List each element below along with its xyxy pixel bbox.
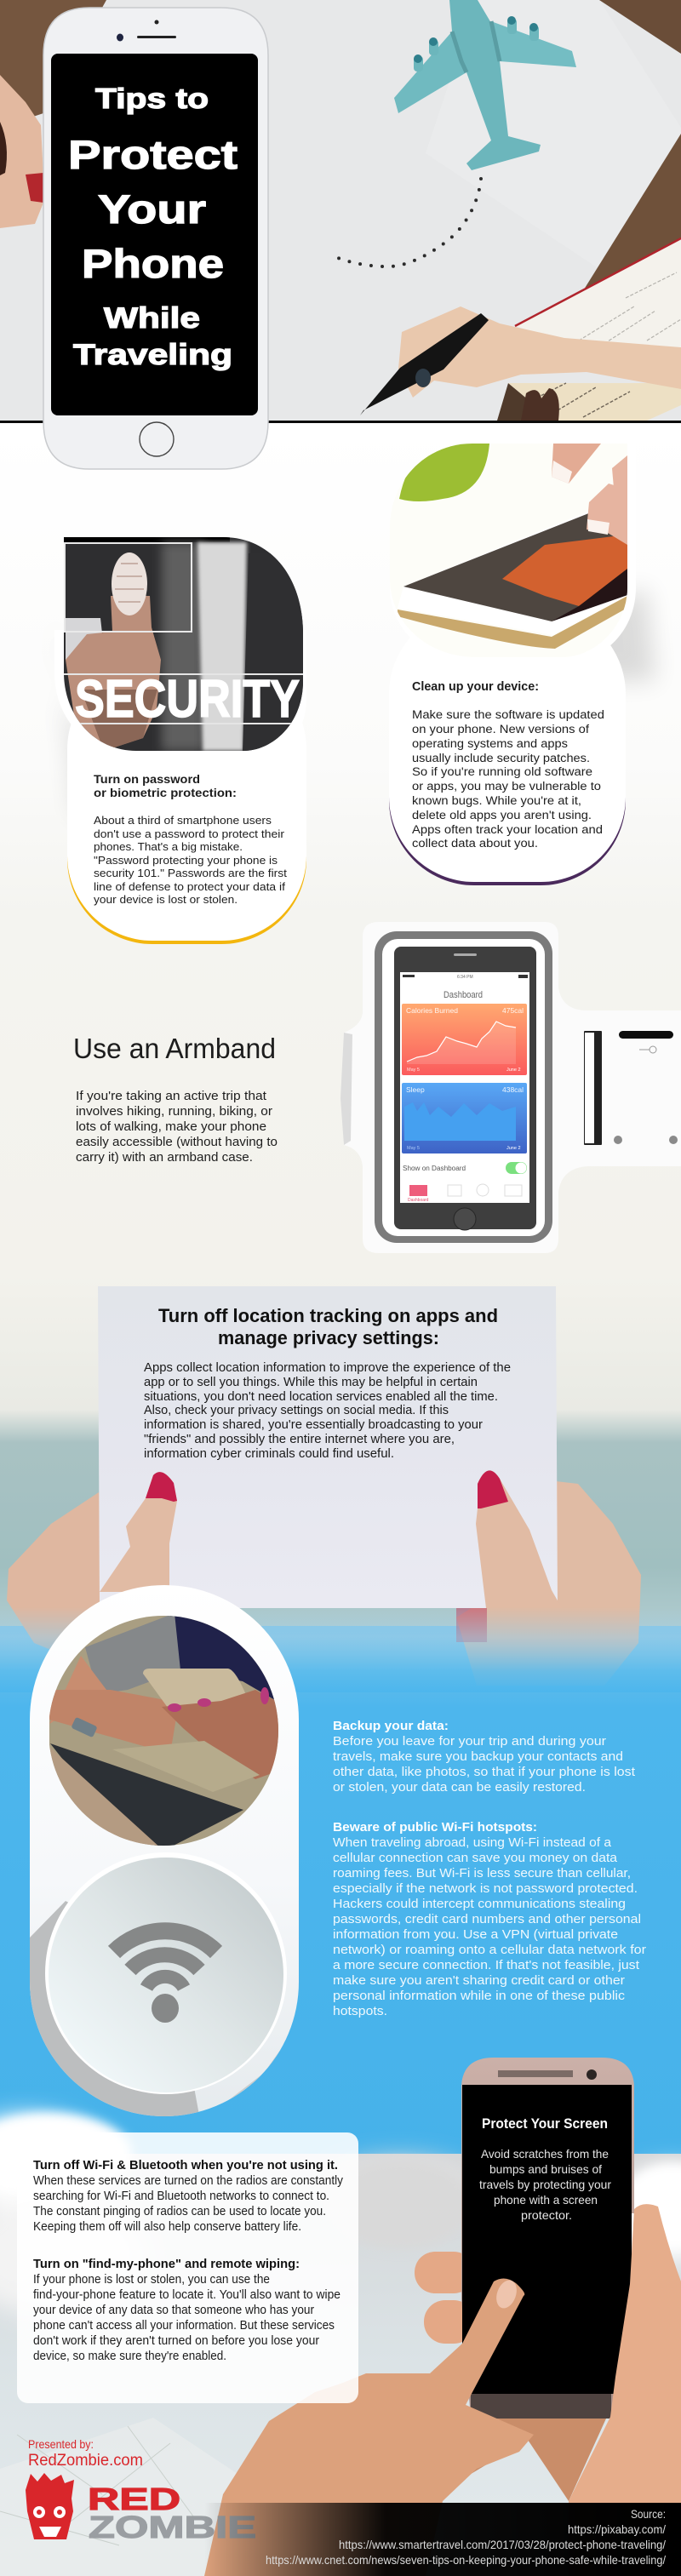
- body text: or apps, you may be vulnerable to: [412, 780, 601, 793]
- body text: Make sure the software is updated: [412, 708, 604, 721]
- calories card: May 5: [407, 1068, 420, 1073]
- text: beware of public wifi hotspots: a more secure connection. If that's not feasible, just: [333, 1958, 640, 1972]
- background: page: [0, 423, 681, 1274]
- body text: on your phone. New versions of: [412, 723, 589, 736]
- phone white front: [398, 495, 627, 635]
- title: Tips to: [95, 83, 209, 114]
- text: backup your data: [333, 1719, 636, 1795]
- background: sea: [0, 1274, 681, 1640]
- card white body: [389, 609, 626, 882]
- panel: white pill with images: [30, 1585, 299, 2120]
- body text: [412, 708, 604, 850]
- text: beware of public wifi hotspots: Beware of public Wi-Fi hotspots:: [333, 1820, 537, 1835]
- notebook handwriting: [579, 272, 681, 349]
- label B: [669, 1136, 678, 1144]
- body: wifi and bluetooth: searching for Wi-Fi and Bluetooth networks to connect to.: [33, 2190, 329, 2203]
- text: backup your data: travels, make sure you backup your contacts and: [333, 1749, 623, 1764]
- dotted flight path: [329, 179, 481, 266]
- title: Your: [98, 186, 206, 232]
- text: beware of public wifi hotspots: When traveling abroad, using Wi-Fi instead of a: [333, 1835, 612, 1850]
- white inner frame: [382, 939, 545, 1236]
- wifi disc rim: [45, 1852, 287, 2094]
- pen: [360, 313, 489, 415]
- back fingers: [415, 2252, 474, 2293]
- text: armband body: involves hiking, running, biking, or: [76, 1105, 272, 1119]
- heading: [94, 772, 237, 799]
- source text: [266, 2507, 666, 2567]
- notebook red edge: [515, 238, 681, 326]
- heading: wifi and bluetooth: Turn off Wi-Fi & Bluetooth when you're not using it.: [33, 2158, 338, 2172]
- back finger two: [424, 2300, 475, 2344]
- text: beware of public wifi hotspots: passwords, credit card numbers and other personal: [333, 1912, 641, 1926]
- card purple base: [389, 621, 626, 885]
- front camera: [117, 34, 123, 41]
- home button: [454, 1208, 476, 1230]
- body: wifi and bluetooth: The constant pinging of radios can be used to locate you.: [33, 2205, 326, 2218]
- heading: or biometric protection:: [94, 786, 237, 799]
- panel: wifi and find-my-phone tips: [17, 2132, 358, 2403]
- panel: clean up your device: [389, 444, 655, 885]
- security word: SECURITY: [75, 670, 300, 729]
- wordmark red: RED: [88, 2482, 180, 2516]
- paper body: app or to sell you things. While this may be helpful in certain: [144, 1376, 478, 1389]
- green apple: [399, 444, 489, 501]
- wifi disc light wedge: [228, 2050, 281, 2100]
- text: beware of public wifi hotspots: information from you. Use a VPN (virtual private: [333, 1927, 618, 1942]
- calories card: 475cal: [502, 1006, 524, 1015]
- text: backup your data: other data, like photos, so that if your phone is lost: [333, 1765, 636, 1779]
- text: backup your data: Backup your data:: [333, 1719, 449, 1733]
- coffee cup: [0, 122, 7, 175]
- right hand: [569, 2204, 681, 2576]
- screen body: travels by protecting your: [479, 2178, 611, 2191]
- earpiece dot: [155, 20, 158, 24]
- heading: use an armband: Use an Armband: [73, 1033, 276, 1064]
- body text: [94, 814, 287, 906]
- sleep card: [402, 1083, 527, 1153]
- text: armband body: easily accessible (without having to: [76, 1136, 278, 1149]
- phone screen: [403, 513, 627, 621]
- left nail: [146, 1472, 177, 1502]
- body: wifi and bluetooth: When these services are turned on the radios are constantly: [33, 2174, 344, 2188]
- earpiece: [137, 36, 176, 38]
- body text: About a third of smartphone users: [94, 814, 272, 827]
- text: armband body: carry it) with an armband case.: [76, 1151, 253, 1165]
- body: find my phone: don't work if they aren't turned on before you lose your: [33, 2334, 319, 2348]
- body: find my phone: find-your-phone feature to locate it. You'll also want to wipe: [33, 2288, 340, 2302]
- card shadow: [54, 613, 255, 817]
- body text: "Password protecting your phone is: [94, 854, 278, 867]
- phone photo: [390, 444, 627, 657]
- image backing: [390, 444, 636, 663]
- phone camera: [587, 2069, 597, 2080]
- presented by credit: Presented by:: [28, 2437, 94, 2451]
- title: Traveling: [73, 339, 232, 371]
- show on dashboard: Show on Dashboard: [403, 1165, 466, 1172]
- main hand and index finger: [204, 2278, 534, 2576]
- body text: phones. That's a big mistake.: [94, 840, 243, 853]
- calories card: June 2: [506, 1068, 521, 1073]
- paper heading: manage privacy settings:: [218, 1327, 439, 1348]
- title: Protect: [68, 132, 237, 177]
- hero photo: [0, 0, 681, 421]
- armband illustration: [340, 922, 681, 1253]
- screen heading: Protect Your Screen: [482, 2115, 608, 2132]
- title: [68, 83, 237, 371]
- status bar: 6:34 PM: [457, 975, 473, 980]
- card shadow: [426, 587, 655, 681]
- wifi disc: [49, 1858, 283, 2092]
- thumbnail: [493, 2277, 520, 2311]
- fade into clouds: [0, 1607, 681, 1692]
- photo: hands holding paper: [0, 1286, 681, 1692]
- dark fingers under notebook: [521, 388, 559, 421]
- screen body: [479, 2147, 611, 2222]
- screen body: phone with a screen: [494, 2193, 598, 2207]
- orange flower: [502, 535, 627, 606]
- presented by credit: RedZombie.com: [28, 2452, 143, 2470]
- palm under phone: [426, 2409, 610, 2501]
- body text: So if you're running old software: [412, 765, 592, 778]
- body text: delete old apps you aren't using.: [412, 809, 592, 821]
- paper body: Also, check your privacy settings on social media. If this: [144, 1404, 449, 1417]
- notebook page: [515, 238, 681, 358]
- calories card: [402, 1004, 527, 1075]
- paper: [98, 1286, 558, 1608]
- background: sky: [0, 1626, 681, 2171]
- text: beware of public wifi hotspots: personal information while in one of these public: [333, 1989, 626, 2003]
- grey frame: [375, 931, 552, 1243]
- logo: red zombie: [26, 2473, 256, 2545]
- paper body: Apps collect location information to improve the experience of the: [144, 1361, 511, 1375]
- nail: [415, 369, 431, 387]
- body text: your device is lost or stolen.: [94, 893, 237, 906]
- home button: [140, 422, 174, 456]
- heading: Clean up your device:: [412, 680, 539, 694]
- black band: [204, 2503, 681, 2576]
- text: beware of public wifi hotspots: make sure you aren't sharing credit card or other: [333, 1973, 625, 1988]
- source bar: [204, 2503, 681, 2576]
- black divider bar: [0, 421, 681, 423]
- screen body: Avoid scratches from the: [481, 2147, 609, 2161]
- image backing: [54, 630, 306, 758]
- fingers: [552, 444, 601, 484]
- tab bar: Dashboard: [408, 1198, 429, 1203]
- screen body: bumps and bruises of: [489, 2162, 602, 2176]
- pill: [30, 1585, 299, 2116]
- zombie head icon: [26, 2473, 74, 2539]
- label A: [614, 1136, 622, 1144]
- phone screen: [400, 972, 529, 1203]
- top speaker: [498, 2070, 573, 2077]
- left thumb: [100, 1472, 177, 1592]
- wifi disc drop shadow: [30, 1901, 200, 2120]
- battery: [518, 975, 528, 978]
- title: While: [104, 302, 200, 335]
- screen: [51, 54, 258, 415]
- phone screen: [462, 2085, 632, 2394]
- icon: wifi: [114, 1931, 216, 2023]
- key slot: [619, 1031, 673, 1039]
- card yellow base: [67, 681, 306, 944]
- icon: key: [639, 1046, 656, 1053]
- text: beware of public wifi hotspots: network) or roaming onto a cellular data network for: [333, 1943, 646, 1957]
- phone body: [43, 8, 268, 469]
- lower notebook: [508, 383, 681, 421]
- heading: Turn on password: [94, 772, 200, 786]
- paper heading: Turn off location tracking on apps and: [158, 1305, 498, 1326]
- body: find my phone: [33, 2273, 340, 2363]
- text: armband body: [76, 1090, 278, 1165]
- text: beware of public wifi hotspots: roaming fees. But Wi-Fi is less secure than cellular,: [333, 1866, 631, 1880]
- text: beware of public wifi hotspots: Hackers could intercept communications stealing: [333, 1897, 626, 1911]
- tab bar: [408, 1184, 522, 1203]
- sleep card: Sleep: [406, 1085, 425, 1094]
- earpiece: [454, 953, 477, 956]
- body text: usually include security patches.: [412, 752, 590, 764]
- phone body: [461, 2058, 634, 2419]
- left hand: [0, 75, 43, 228]
- paper body: situations, you don't need location services enabled all the time.: [144, 1390, 498, 1404]
- text: armband body: If you're taking an active trip that: [76, 1090, 266, 1103]
- calories card: Calories Burned: [406, 1006, 458, 1015]
- presented by credit: [28, 2437, 143, 2470]
- right nail: [478, 1470, 508, 1508]
- dashboard label: Dashboard: [444, 990, 483, 1000]
- lower wood: [497, 383, 553, 421]
- body text: collect data about you.: [412, 837, 538, 850]
- finger shadow: [456, 1608, 487, 1642]
- source text: Source:: [631, 2507, 666, 2521]
- body text: Apps often track your location and: [412, 823, 603, 836]
- text: backup your data: or stolen, your data can be easily restored.: [333, 1780, 586, 1795]
- body: wifi and bluetooth: [33, 2174, 344, 2234]
- paper heading: [158, 1305, 498, 1348]
- paper folds: [426, 0, 681, 323]
- phone mockup with title: [43, 8, 268, 469]
- translucent box: [17, 2132, 358, 2403]
- red cup: [26, 173, 43, 203]
- security photo: [64, 537, 303, 751]
- photo: hands holding phone: [204, 2058, 681, 2576]
- paper body: "friends" and possibly the entire internet where you are,: [144, 1433, 455, 1446]
- panel: password and biometric protection: [54, 537, 306, 944]
- heading: find my phone: Turn on "find-my-phone" and remote wiping:: [33, 2257, 300, 2271]
- text: beware of public wifi hotspots: hotspots.: [333, 2004, 387, 2018]
- sleep card: June 2: [506, 1146, 521, 1151]
- left flap edge: [340, 1033, 352, 1145]
- text: armband body: lots of walking, make your phone: [76, 1120, 266, 1134]
- lower notebook handwriting: [532, 383, 630, 417]
- hand with pen: [398, 306, 681, 398]
- wood top left: [0, 0, 106, 119]
- icon: airplane: [394, 0, 576, 170]
- source text: https://pixabay.com/: [568, 2522, 666, 2536]
- text: beware of public wifi hotspots: cellular connection can save you money on data: [333, 1851, 618, 1865]
- strap slot: [584, 1031, 602, 1145]
- bottom speaker: [471, 2394, 611, 2419]
- toggle: [506, 1162, 527, 1174]
- body: wifi and bluetooth: Keeping them off will also help conserve battery life.: [33, 2220, 301, 2234]
- body: find my phone: device, so make sure they're enabled.: [33, 2350, 226, 2363]
- sleep card: May 5: [407, 1146, 420, 1151]
- gold edge: [398, 596, 627, 649]
- paper body: [144, 1361, 511, 1461]
- body: find my phone: phone can't access all your information. But these services: [33, 2319, 335, 2333]
- left hand behind: [7, 1492, 136, 1656]
- body: find my phone: If your phone is lost or stolen, you can use the: [33, 2273, 270, 2287]
- wood top right: [599, 0, 681, 54]
- signal dots: [403, 975, 415, 977]
- body text: operating systems and apps: [412, 737, 568, 750]
- photo: backup phone and laptop: [49, 1613, 279, 1852]
- screen body: protector.: [521, 2208, 572, 2222]
- right thumb: [476, 1470, 562, 1608]
- body: find my phone: your device of any data so that someone who has your: [33, 2304, 314, 2317]
- body text: security 101." Passwords are the first: [94, 867, 287, 879]
- body text: line of defense to protect your data if: [94, 880, 285, 893]
- body text: known bugs. While you're at it,: [412, 794, 581, 807]
- card white body: [67, 664, 306, 941]
- background: clouds and map: [0, 2113, 681, 2576]
- source text: https://www.smartertravel.com/2017/03/28/protect-phone-traveling/: [339, 2538, 666, 2551]
- wordmark zombie: ZOMBIE: [89, 2510, 256, 2545]
- wood middle right: [584, 134, 681, 289]
- text: backup your data: Before you leave for your trip and during your: [333, 1734, 606, 1749]
- paper body: information is shared, you're essentially broadcasting to your: [144, 1418, 483, 1432]
- text: beware of public wifi hotspots: [333, 1820, 646, 2018]
- text: beware of public wifi hotspots: especially if the network is not password protected.: [333, 1881, 638, 1896]
- right hand behind: [456, 1481, 641, 1686]
- body text: don't use a password to protect their: [94, 827, 285, 840]
- paper body: information cyber criminals could find useful.: [144, 1447, 394, 1461]
- title: Phone: [82, 241, 224, 286]
- band fabric: [342, 922, 681, 1253]
- phone body: [394, 947, 536, 1229]
- sleep card: 438cal: [502, 1085, 524, 1094]
